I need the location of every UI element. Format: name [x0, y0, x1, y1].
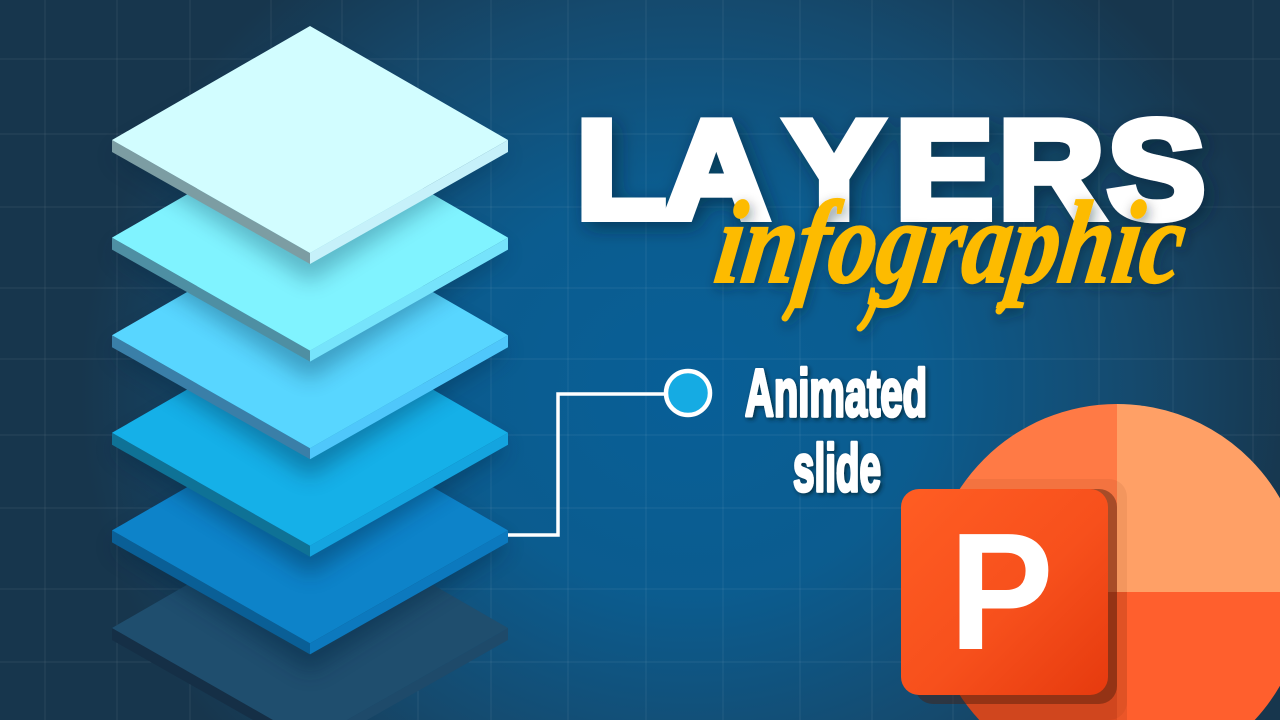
subtitle flourishes — [785, 296, 1008, 328]
marker dot — [666, 371, 710, 415]
label line 2: slide — [793, 431, 881, 506]
connector line from layer 5 to marker — [508, 394, 666, 535]
logo soft shadow — [960, 479, 1127, 720]
layer 6: dark base layer — [112, 514, 508, 720]
label line 1: Animated — [745, 356, 927, 431]
logo tile — [901, 489, 1108, 695]
logo pie circle — [929, 404, 1280, 720]
layer 2: aqua layer — [112, 124, 508, 380]
layer 3: sky blue layer — [112, 221, 508, 477]
label: Animated slide — [745, 356, 927, 506]
layer 1: top pale layer — [112, 26, 508, 282]
subtitle text: infographic — [708, 177, 1194, 308]
icon: PowerPoint logo — [880, 404, 1280, 720]
layer 5: blue layer — [112, 416, 508, 672]
title: LAYERS: LAYERS — [576, 93, 1205, 248]
logo hard shadow — [915, 489, 1117, 704]
layer 4: bright blue layer — [112, 319, 508, 575]
logo letter P: P — [949, 499, 1054, 685]
subtitle: infographic — [708, 177, 1194, 328]
layer stack illustration — [112, 26, 508, 720]
